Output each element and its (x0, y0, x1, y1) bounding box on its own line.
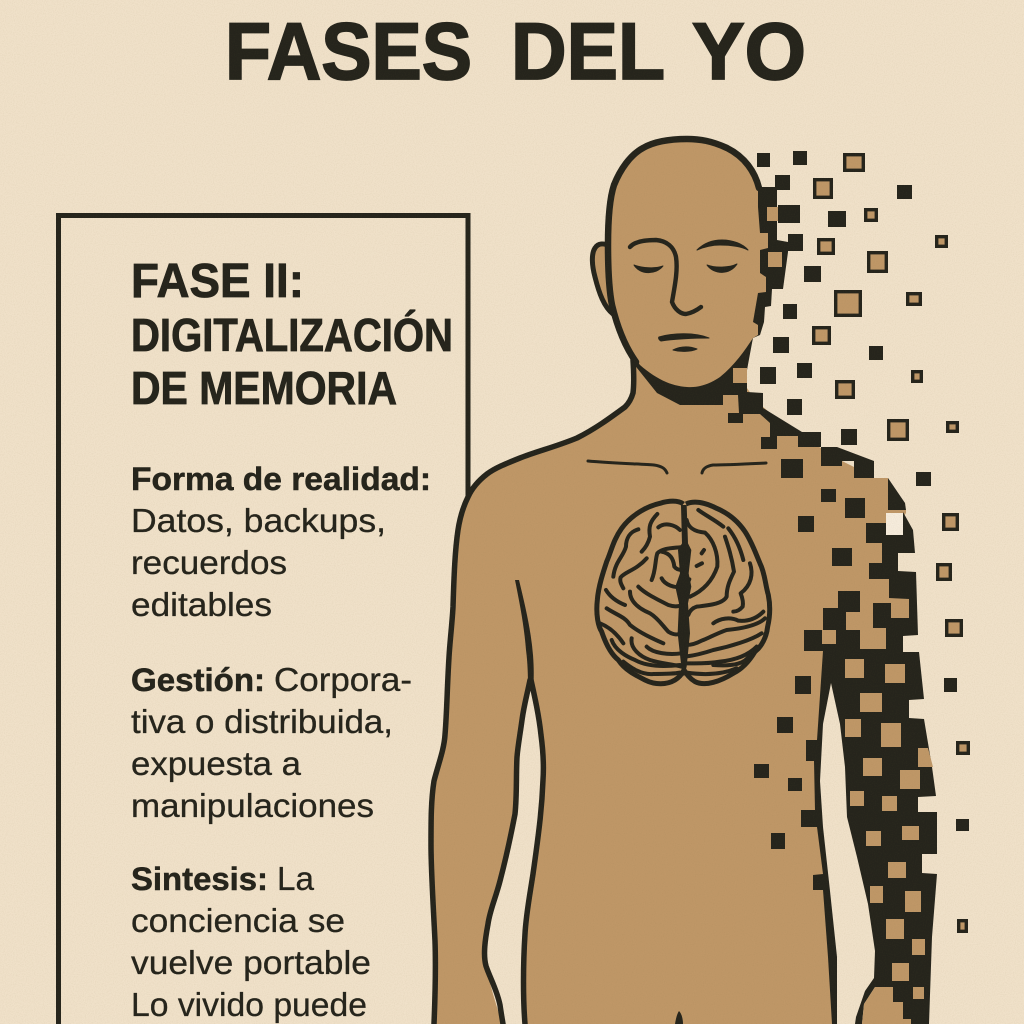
left brow and nose (630, 240, 701, 314)
right brow (697, 240, 748, 250)
text block: sintesis: Lo vivido puede (131, 986, 367, 1023)
left collarbone (588, 461, 667, 473)
text block: forma de realidad: Forma de realidad: (131, 461, 431, 497)
dark pixel fragments (754, 151, 969, 849)
left eye (634, 265, 663, 273)
title: DEL (511, 7, 665, 97)
text block: sintesis (131, 860, 371, 1023)
title (225, 7, 806, 97)
dissolving shoulder triangle (888, 478, 906, 510)
brain (597, 501, 770, 684)
head outline (608, 139, 759, 362)
text block: gestion: tiva o distribuida, (131, 703, 393, 740)
panel heading: FASE II: (131, 255, 304, 308)
crotch line (675, 1011, 683, 1024)
skin patches in the shadow (733, 207, 782, 383)
gap between arm and torso (488, 688, 541, 1024)
skin pixels on arm (822, 630, 933, 999)
text block: gestion (131, 661, 412, 824)
text block: gestion: expuesta a (131, 745, 302, 782)
armpit fold (515, 580, 534, 690)
right collarbone (702, 463, 766, 473)
text block: sintesis: vuelve portable (131, 944, 371, 981)
lower lip (673, 347, 697, 351)
text block: forma de realidad: Datos, backups, (131, 502, 386, 539)
dissolving arm (801, 512, 937, 1024)
background hole in shoulder (886, 513, 903, 535)
neck shadow and head edge (633, 187, 874, 478)
right hemisphere folds (685, 510, 765, 674)
face (607, 139, 768, 387)
text block: sintesis: La (277, 860, 315, 897)
mouth (659, 334, 709, 341)
panel frame (58, 216, 468, 1024)
left hemisphere folds (600, 514, 689, 674)
ear (592, 244, 613, 314)
text block: gestion: Gestión: (131, 662, 265, 698)
title: FASES (225, 7, 472, 97)
panel heading: DIGITALIZACIÓN (131, 309, 453, 361)
text block: forma de realidad: recuerdos (131, 544, 287, 581)
body silhouette (431, 363, 912, 1024)
framed pixel fragments (814, 155, 968, 931)
hand (862, 987, 911, 1024)
text block: sintesis: Sintesis: (131, 861, 268, 897)
panel heading (131, 255, 453, 414)
text block: gestion: manipulaciones (131, 787, 374, 824)
text block: gestion: Corpora- (274, 661, 412, 698)
text block: forma de realidad (131, 461, 431, 623)
figure: dissolving human body (431, 139, 969, 1024)
text block: sintesis: conciencia se (131, 902, 345, 939)
central fissure (675, 505, 691, 677)
brain outline (597, 501, 770, 684)
left outline strokes (431, 360, 634, 1024)
title: YO (692, 7, 806, 97)
right eye (707, 264, 737, 272)
panel heading: DE MEMORIA (131, 362, 397, 414)
face features (588, 240, 766, 473)
text block: forma de realidad: editables (131, 586, 272, 623)
panel: phase II text box (58, 216, 468, 1024)
